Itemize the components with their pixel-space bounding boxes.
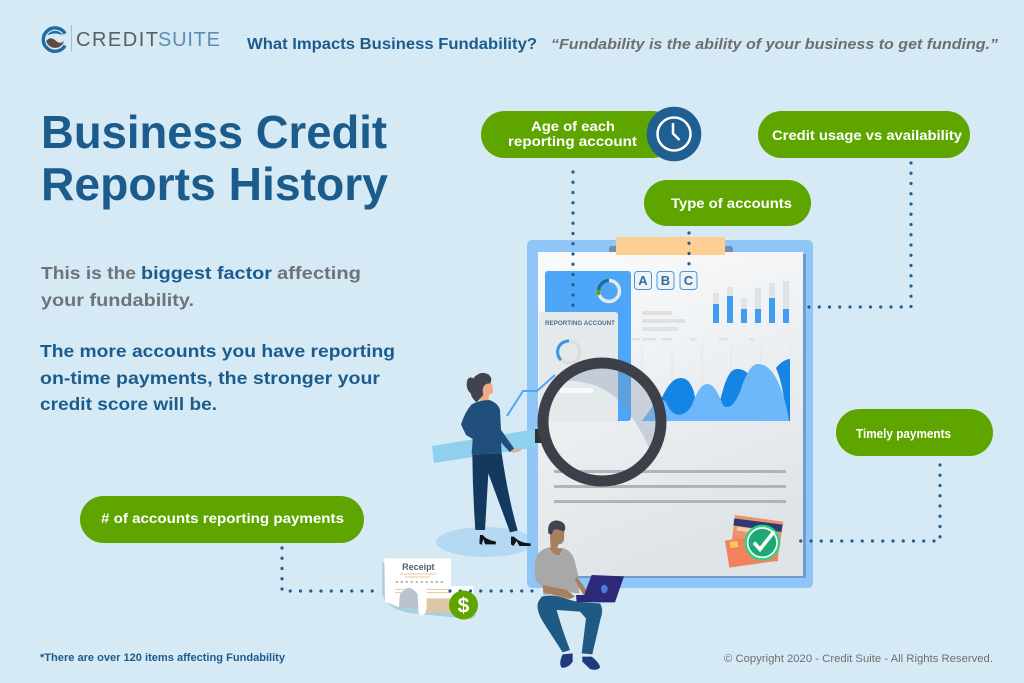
copyright: © Copyright 2020 - Credit Suite - All Rights Reserved. (724, 653, 993, 665)
dotted connector: number of accounts (282, 548, 378, 591)
pill: number of accounts reporting payments: # of accounts reporting payments (101, 511, 344, 526)
dollar badge: $ (458, 594, 470, 618)
dollar badge (449, 590, 478, 620)
area chart (642, 347, 790, 421)
ABC account type icons: B (661, 273, 670, 288)
document text lines (554, 470, 786, 503)
header question: What Impacts Business Fundability? (247, 36, 537, 53)
placeholder text lines (632, 311, 754, 340)
woman floor shadow (436, 527, 534, 557)
text block: biggest factor (41, 263, 361, 310)
footnote: *There are over 120 items affecting Fundability (40, 652, 286, 664)
header quote: “Fundability is the ability of your business to get funding.” (551, 36, 999, 53)
text block: more accounts (40, 341, 395, 414)
man with laptop (535, 520, 624, 670)
blue report panel (545, 271, 631, 421)
pill: age of each reporting account: Age of each (531, 119, 615, 134)
text block: biggest factor: affecting (277, 263, 361, 283)
trend line (507, 375, 555, 416)
text block: more accounts: The more accounts you have reporting (40, 341, 395, 361)
pill: timely payments: Timely payments (856, 427, 951, 441)
text block: biggest factor: your fundability. (41, 290, 194, 310)
text block: more accounts: on-time payments, the stronger your (40, 368, 380, 388)
text block: more accounts: credit score will be. (40, 394, 217, 414)
dotted connector: age of account (571, 172, 575, 310)
pill: type of accounts (644, 180, 811, 226)
ABC account type icons: A (638, 273, 648, 288)
pill: number of accounts reporting payments (80, 496, 364, 543)
logo: SUITE (158, 29, 220, 51)
title (41, 106, 388, 210)
credit cards with check icon (725, 515, 783, 568)
ABC account type icons: C (684, 273, 694, 288)
logo (43, 25, 220, 52)
tape (616, 237, 725, 255)
reporting account card: REPORTING ACCOUNT (545, 320, 615, 327)
receipt icon: Receipt (402, 562, 435, 572)
icon: clock (647, 107, 701, 161)
dotted connector: timely payments (793, 465, 940, 541)
ABC account type icons (634, 272, 697, 290)
receipt icon (382, 558, 477, 619)
woman figure (461, 373, 531, 546)
pill: credit usage vs availability: Credit usage vs availability (772, 128, 963, 143)
pill: age of each reporting account (481, 107, 701, 161)
bar chart (713, 281, 789, 323)
dotted connector: receipt to man (450, 589, 540, 593)
pill: timely payments (836, 409, 993, 456)
text block: biggest factor: This is the (41, 263, 136, 283)
pill: credit usage vs availability (758, 111, 970, 158)
title: Reports History (41, 158, 388, 210)
reporting account card (539, 312, 618, 422)
text block: biggest factor: biggest factor (141, 263, 272, 283)
magnifying glass (535, 350, 670, 481)
dotted connector: type of accounts (687, 233, 691, 268)
title: Business Credit (41, 106, 387, 158)
dotted connector: credit usage (800, 163, 911, 307)
pill: type of accounts: Type of accounts (671, 196, 792, 211)
ruler (432, 429, 537, 463)
logo: CREDIT (76, 29, 158, 51)
clipboard (527, 237, 813, 588)
pill: age of each reporting account: reporting account (508, 134, 638, 149)
